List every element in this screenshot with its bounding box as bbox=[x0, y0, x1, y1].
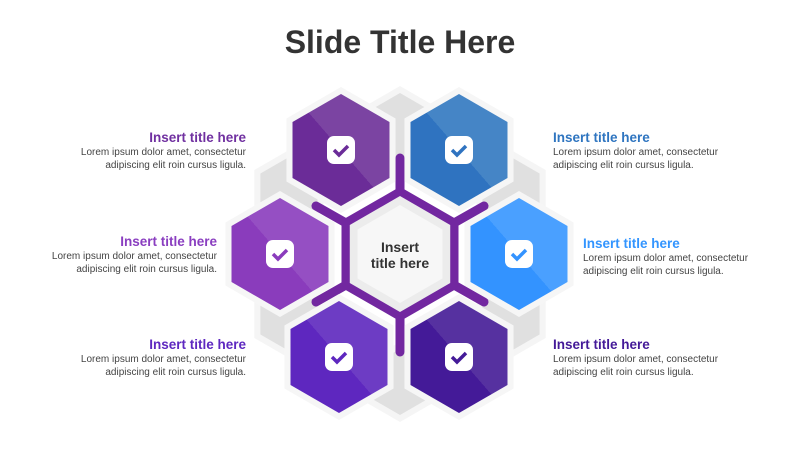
center hexagon bbox=[350, 196, 450, 312]
text: right middle: adipiscing elit roin cursus ligula. bbox=[583, 266, 724, 276]
hex: top-right bbox=[404, 87, 514, 213]
text: right top: Insert title here bbox=[553, 130, 650, 145]
text: left top: Lorem ipsum dolor amet, consectetur bbox=[81, 147, 246, 158]
hex: top-left bbox=[286, 87, 396, 213]
text: left top: adipiscing elit roin cursus ligula. bbox=[105, 160, 246, 170]
hex: bottom-left bbox=[284, 294, 394, 420]
text: right top bbox=[553, 130, 718, 170]
text: left bottom: Lorem ipsum dolor amet, consectetur bbox=[81, 354, 246, 365]
hex: right bbox=[464, 191, 574, 317]
title: Slide Title Here bbox=[285, 24, 515, 60]
text: left middle bbox=[52, 234, 217, 274]
text: right bottom: adipiscing elit roin cursus ligula. bbox=[553, 366, 694, 378]
text: right middle: Lorem ipsum dolor amet, consectetur bbox=[583, 253, 748, 264]
center hexagon: title here bbox=[371, 255, 429, 271]
text: left middle: adipiscing elit roin cursus ligula. bbox=[76, 264, 217, 274]
text: left middle: Insert title here bbox=[120, 234, 217, 249]
hex: bottom-right bbox=[404, 294, 514, 420]
text: right bottom: Insert title here bbox=[553, 337, 650, 352]
text: right bottom: Lorem ipsum dolor amet, consectetur bbox=[553, 354, 718, 365]
gray background hexes bbox=[254, 86, 546, 422]
text: right middle bbox=[583, 236, 748, 276]
text: right middle: Insert title here bbox=[583, 236, 680, 251]
purple frame bbox=[316, 158, 484, 352]
hex: left bbox=[225, 191, 335, 317]
text: right top: adipiscing elit roin cursus ligula. bbox=[553, 160, 694, 170]
text: left middle: Lorem ipsum dolor amet, consectetur bbox=[52, 251, 217, 262]
text: left top bbox=[81, 130, 246, 170]
text: left bottom bbox=[81, 337, 246, 378]
text: left bottom: Insert title here bbox=[149, 337, 246, 352]
center hexagon: Insert bbox=[381, 239, 419, 255]
text: left bottom: adipiscing elit roin cursus ligula. bbox=[105, 366, 246, 378]
text: right top: Lorem ipsum dolor amet, consectetur bbox=[553, 147, 718, 158]
text: left top: Insert title here bbox=[149, 130, 246, 145]
text: right bottom bbox=[553, 337, 718, 378]
